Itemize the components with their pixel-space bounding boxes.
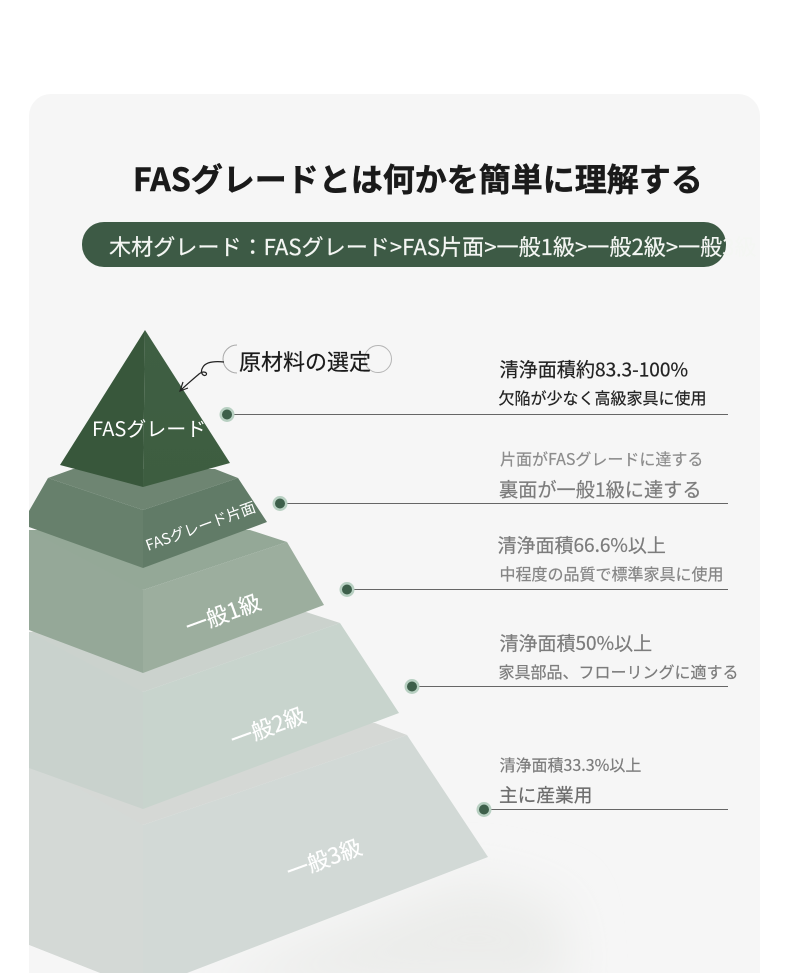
text block: 一般1級 description [498, 531, 724, 585]
text block: 一般3級 description: 清浄面積33.3%以上 [500, 752, 641, 776]
text block: FASグレード description: 清浄面積約83.3-100% [500, 354, 688, 382]
leader: 一般2級 [404, 679, 728, 694]
leader: 一般1級 [340, 582, 728, 597]
tier: 一般3級: 一般3級 [281, 830, 366, 887]
tier: 一般2級 [29, 612, 399, 809]
arrow: callout to apex [180, 362, 224, 391]
tier: 一般2級: 一般2級 [225, 698, 310, 755]
callout: 原材料の選定 [180, 345, 392, 391]
text block: 一般2級 description [498, 629, 739, 683]
title: FASグレードとは何かを簡単に理解する [133, 155, 703, 201]
tier: FASグレード: FASグレード [92, 413, 206, 442]
banner: wood grade order: 木材グレード：FASグレード>FAS片面>一般1級>一般2級>一般3級 [109, 230, 757, 262]
text block: FASグレード description [498, 354, 707, 409]
tier: FASグレード [60, 330, 230, 487]
leader: FAS片面 [272, 496, 728, 511]
text block: FAS片面 description [499, 446, 703, 502]
tier: FASグレード片面 [29, 469, 267, 568]
text block: 一般1級 description: 清浄面積66.6%以上 [498, 531, 666, 558]
pyramid chart [29, 330, 570, 973]
tier: 一般3級 [29, 723, 488, 973]
text block: 一般3級 description [499, 752, 641, 808]
text block: FAS片面 description: 裏面が一般1級に達する [499, 474, 702, 502]
text block: 一般1級 description: 中程度の品質で標準家具に使用 [500, 561, 724, 585]
leader: FASグレード [220, 407, 728, 422]
text block: FAS片面 description: 片面がFASグレードに達する [500, 446, 703, 470]
text block: FASグレード description: 欠陥が少なく高級家具に使用 [498, 385, 707, 409]
text block: 一般2級 description: 家具部品、フローリングに適する [498, 659, 739, 683]
banner: wood grade order [82, 222, 757, 267]
text block: 一般3級 description: 主に産業用 [499, 781, 592, 808]
leader: 一般3級 [476, 802, 728, 817]
text block: 一般2級 description: 清浄面積50%以上 [500, 629, 652, 656]
tier: 一般1級: 一般1級 [180, 585, 265, 642]
pyramid ground shadow [320, 900, 548, 973]
tier: FASグレード片面: FASグレード片面 [143, 496, 258, 556]
tier: 一般1級 [29, 530, 324, 673]
callout: 原材料の選定: 原材料の選定 [239, 345, 371, 377]
